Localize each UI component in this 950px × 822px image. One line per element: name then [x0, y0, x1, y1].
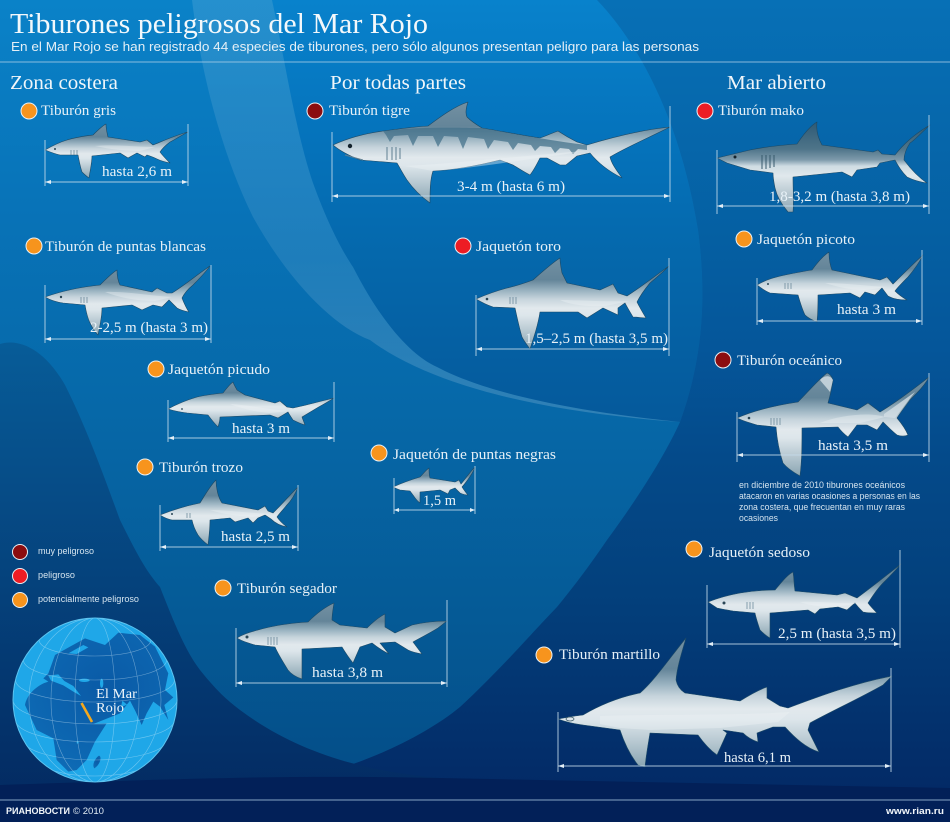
danger dot — [215, 580, 231, 596]
danger dot — [736, 231, 752, 247]
size measure: hasta 3,8 m — [312, 665, 383, 681]
danger dot — [148, 361, 164, 377]
shark: Jaquetón picoto — [736, 231, 923, 325]
size measure — [394, 466, 475, 514]
shark: Tiburón trozo — [137, 459, 298, 551]
shark drawing — [160, 480, 298, 545]
footer url: www.rian.ru — [885, 806, 944, 817]
shark drawing — [237, 603, 447, 679]
size measure: hasta 2,6 m — [102, 164, 172, 180]
icon: Red Sea marker — [82, 703, 92, 722]
shark drawing — [476, 258, 669, 349]
shark: Jaquetón sedoso — [686, 541, 901, 648]
title: Tiburones peligrosos del Mar Rojo — [10, 8, 428, 40]
danger dot — [686, 541, 702, 557]
size measure: 3-4 m (hasta 6 m) — [457, 179, 565, 195]
legend: peligroso: peligroso — [38, 570, 75, 580]
globe label: El Mar — [96, 687, 137, 702]
shark drawing — [393, 467, 475, 503]
note text: atacaron en varias ocasiones a personas en las — [739, 491, 920, 501]
danger dot — [371, 445, 387, 461]
shark: Tiburón de puntas blancas — [26, 238, 211, 343]
danger dot — [697, 103, 713, 119]
shark drawing — [737, 373, 929, 476]
size measure — [558, 668, 891, 772]
shark: Jaquetón toro — [455, 238, 669, 356]
shark drawing — [45, 124, 188, 178]
size measure — [45, 265, 211, 343]
species name: Tiburón martillo — [559, 647, 660, 663]
footer rule — [0, 799, 950, 801]
heading: Por todas partes: Por todas partes — [330, 72, 466, 94]
danger dot — [307, 103, 323, 119]
footer credit — [6, 806, 104, 817]
size measure — [168, 382, 334, 442]
size measure: hasta 2,5 m — [221, 529, 290, 545]
globe label: Rojo — [96, 701, 124, 716]
shark drawing — [708, 564, 901, 638]
size measure: 2,5 m (hasta 3,5 m) — [778, 626, 896, 642]
note text: zona costera, que frecuentan en muy raras — [739, 502, 905, 512]
size measure — [45, 124, 188, 186]
heading: Zona costera: Zona costera — [10, 72, 118, 94]
species name: Tiburón gris — [41, 103, 116, 119]
legend — [12, 544, 139, 608]
shark: Tiburón segador — [215, 580, 447, 687]
header rule — [0, 61, 950, 63]
danger dot — [715, 352, 731, 368]
shark drawing — [558, 638, 892, 767]
heading: Mar abierto: Mar abierto — [727, 72, 826, 94]
size measure — [737, 373, 929, 462]
shark: Tiburón gris — [21, 103, 188, 186]
size measure — [476, 258, 669, 356]
species name: Tiburón trozo — [159, 460, 243, 476]
note text: en diciembre de 2010 tiburones oceánicos — [739, 480, 905, 490]
subtitle: En el Mar Rojo se han registrado 44 especies de tiburones, pero sólo algunos presentan peligro para las personas — [11, 39, 700, 54]
note text — [739, 480, 920, 523]
species name: Tiburón tigre — [329, 103, 410, 119]
danger dot — [455, 238, 471, 254]
shark: Jaquetón de puntas negras — [371, 445, 556, 514]
note text: ocasiones — [739, 513, 778, 523]
species name: Tiburón oceánico — [737, 353, 842, 369]
danger dot — [21, 103, 37, 119]
size measure — [757, 250, 922, 325]
size measure — [717, 115, 929, 214]
shark drawing — [333, 102, 670, 203]
species name: Jaquetón sedoso — [709, 545, 810, 561]
species name: Jaquetón toro — [476, 239, 561, 255]
shark: Tiburón tigre — [307, 102, 670, 203]
species name: Jaquetón picoto — [757, 232, 855, 248]
danger dot — [137, 459, 153, 475]
shark drawing — [168, 382, 334, 427]
shark: Tiburón mako — [697, 103, 930, 214]
globe — [13, 618, 177, 782]
species name: Tiburón de puntas blancas — [45, 239, 206, 255]
size measure: 1,5 m — [423, 493, 456, 509]
species name: Jaquetón de puntas negras — [393, 447, 556, 463]
shark drawing — [757, 252, 923, 322]
size measure: hasta 6,1 m — [724, 750, 791, 766]
size measure: hasta 3,5 m — [818, 438, 888, 454]
shark: Jaquetón picudo — [148, 361, 334, 442]
shark: Tiburón oceánico — [715, 352, 929, 523]
species name: Tiburón mako — [718, 103, 804, 119]
size measure: 2-2,5 m (hasta 3 m) — [90, 320, 208, 336]
shark: Tiburón martillo — [536, 638, 892, 772]
shark drawing — [717, 122, 930, 212]
size measure: hasta 3 m — [232, 421, 290, 437]
legend: muy peligroso: muy peligroso — [38, 546, 94, 556]
legend: potencialmente peligroso: potencialmente peligroso — [38, 594, 139, 604]
danger dot — [536, 647, 552, 663]
size measure — [332, 106, 670, 202]
globe label — [96, 687, 137, 716]
danger dot — [26, 238, 42, 254]
size measure: 1,8-3,2 m (hasta 3,8 m) — [769, 189, 910, 205]
size measure — [160, 485, 298, 551]
size measure: 1,5–2,5 m (hasta 3,5 m) — [525, 331, 668, 347]
footer credit: © 2010 — [73, 806, 104, 817]
size measure — [707, 550, 900, 648]
shark drawing — [45, 266, 210, 335]
size measure — [236, 600, 447, 687]
species name: Jaquetón picudo — [168, 362, 270, 378]
footer credit: РИАНОВОСТИ — [6, 806, 70, 817]
size measure: hasta 3 m — [837, 302, 896, 318]
species name: Tiburón segador — [237, 581, 337, 597]
